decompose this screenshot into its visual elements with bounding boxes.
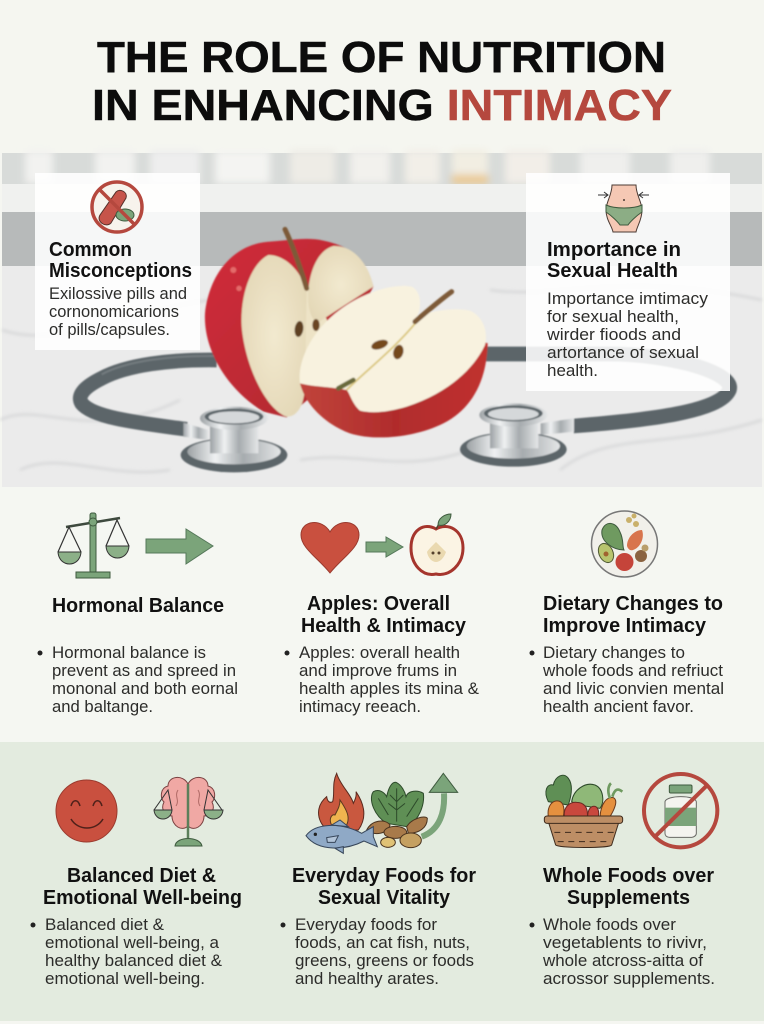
text: whole foods: whole atcross-aitta of bbox=[542, 951, 703, 970]
front apple half bbox=[300, 286, 488, 437]
text: hormonal balance: mononal and both eornal bbox=[52, 679, 238, 698]
text: dietary changes bbox=[530, 643, 724, 716]
text: apples overall health: intimacy reeach. bbox=[299, 697, 421, 716]
heading: everyday foods: Sexual Vitality bbox=[318, 887, 451, 909]
text: everyday foods: Everyday foods for bbox=[295, 915, 437, 934]
panel: common misconceptions bbox=[35, 173, 200, 350]
heading: balanced diet bbox=[43, 865, 242, 909]
text: importance in sexual health: for sexual health, bbox=[547, 307, 679, 326]
heading: apples overall health: Health & Intimacy bbox=[301, 615, 467, 637]
text: everyday foods: foods, an cat fish, nuts, bbox=[295, 933, 470, 952]
heading: common misconceptions bbox=[49, 239, 192, 282]
heading: whole foods: Supplements bbox=[567, 887, 690, 909]
icon: smile and brain scale bbox=[56, 777, 223, 846]
photo background: shelf and marble counter bbox=[0, 150, 762, 487]
heading: importance in sexual health: Importance in bbox=[547, 239, 681, 261]
icon: waist bbox=[598, 185, 649, 232]
text: common misconceptions: cornonomicarions bbox=[49, 302, 179, 321]
text: whole foods bbox=[530, 915, 715, 988]
text: balanced diet: healthy balanced diet & bbox=[45, 951, 223, 970]
icon: food plate bbox=[592, 511, 658, 577]
text: apples overall health bbox=[284, 643, 480, 716]
text: whole foods: acrossor supplements. bbox=[543, 969, 715, 988]
stethoscope left bbox=[80, 356, 287, 472]
icon: no pills bbox=[92, 182, 142, 232]
heading: common misconceptions: Common bbox=[49, 239, 132, 261]
text: hormonal balance bbox=[38, 643, 238, 716]
panel: apples overall health bbox=[284, 514, 480, 716]
heading: whole foods bbox=[543, 865, 714, 909]
heading: importance in sexual health: Sexual Health bbox=[547, 260, 678, 282]
stethoscope right bbox=[460, 354, 730, 467]
text: importance in sexual health: health. bbox=[547, 361, 598, 380]
text: dietary changes: health ancient favor. bbox=[543, 697, 694, 716]
hero photo: apple and stethoscope bbox=[0, 150, 762, 487]
heading: common misconceptions: Misconceptions bbox=[49, 260, 192, 282]
text: balanced diet: emotional well-being. bbox=[45, 969, 205, 988]
heading: hormonal balance: Hormonal Balance bbox=[52, 595, 224, 617]
text: whole foods: vegetablents to rivivr, bbox=[543, 933, 707, 952]
text: common misconceptions: Exilossive pills and bbox=[49, 284, 187, 303]
text: hormonal balance: prevent as and spreed in bbox=[52, 661, 236, 680]
panel: hormonal balance bbox=[38, 513, 238, 716]
heading: everyday foods bbox=[292, 865, 476, 909]
icon: flame fish greens nuts arrow bbox=[306, 773, 458, 853]
text: common misconceptions bbox=[49, 284, 187, 339]
panel: dietary changes bbox=[530, 511, 724, 716]
text: balanced diet: Balanced diet & bbox=[45, 915, 165, 934]
title: IN ENHANCING INTIMACY bbox=[92, 81, 672, 130]
text: dietary changes: whole foods and refriuct bbox=[542, 661, 723, 680]
text: dietary changes: and livic convien mental bbox=[543, 679, 724, 698]
panel: balanced diet bbox=[30, 777, 242, 988]
panel: whole foods bbox=[530, 774, 717, 988]
text: importance in sexual health: wirder fioods and bbox=[546, 325, 681, 344]
text: dietary changes: Dietary changes to bbox=[543, 643, 685, 662]
heading: apples overall health bbox=[301, 593, 467, 637]
text: balanced diet: emotional well-being, a bbox=[45, 933, 220, 952]
heading: balanced diet: Emotional Well-being bbox=[43, 887, 242, 909]
text: whole foods: Whole foods over bbox=[543, 915, 676, 934]
panel: everyday foods bbox=[280, 773, 476, 988]
heading: everyday foods: Everyday Foods for bbox=[292, 865, 476, 887]
text: importance in sexual health bbox=[546, 289, 709, 380]
title: THE ROLE OF NUTRITION bbox=[97, 33, 666, 82]
heading: dietary changes bbox=[543, 593, 723, 637]
text: importance in sexual health: artortance of sexual bbox=[547, 343, 699, 362]
text: hormonal balance: and baltange. bbox=[52, 697, 153, 716]
heading: dietary changes: Improve Intimacy bbox=[543, 615, 707, 637]
heading: importance in sexual health bbox=[547, 239, 681, 282]
text: everyday foods: greens, greens or foods bbox=[295, 951, 474, 970]
heading: whole foods: Whole Foods over bbox=[543, 865, 714, 887]
heading: balanced diet: Balanced Diet & bbox=[67, 865, 216, 887]
icon: vegetable basket and no supplement bbox=[544, 774, 717, 847]
text: everyday foods: and healthy arates. bbox=[295, 969, 439, 988]
text: importance in sexual health: Importance imtimacy bbox=[547, 289, 709, 308]
text: apples overall health: health apples its mina & bbox=[299, 679, 480, 698]
heading: apples overall health: Apples: Overall bbox=[307, 593, 450, 615]
icon: heart arrow apple bbox=[301, 514, 463, 574]
text: hormonal balance: Hormonal balance is bbox=[52, 643, 206, 662]
text: everyday foods bbox=[280, 915, 474, 988]
text: common misconceptions: of pills/capsules. bbox=[49, 320, 170, 339]
back apple half bbox=[205, 229, 373, 417]
title bbox=[92, 33, 672, 130]
text: apples overall health: Apples: overall health bbox=[299, 643, 460, 662]
panel: importance in sexual health bbox=[526, 173, 730, 391]
heading: dietary changes: Dietary Changes to bbox=[543, 593, 723, 615]
text: apples overall health: and improve frums in bbox=[299, 661, 457, 680]
icon: scale and arrow bbox=[58, 513, 213, 578]
text: balanced diet bbox=[30, 915, 223, 988]
